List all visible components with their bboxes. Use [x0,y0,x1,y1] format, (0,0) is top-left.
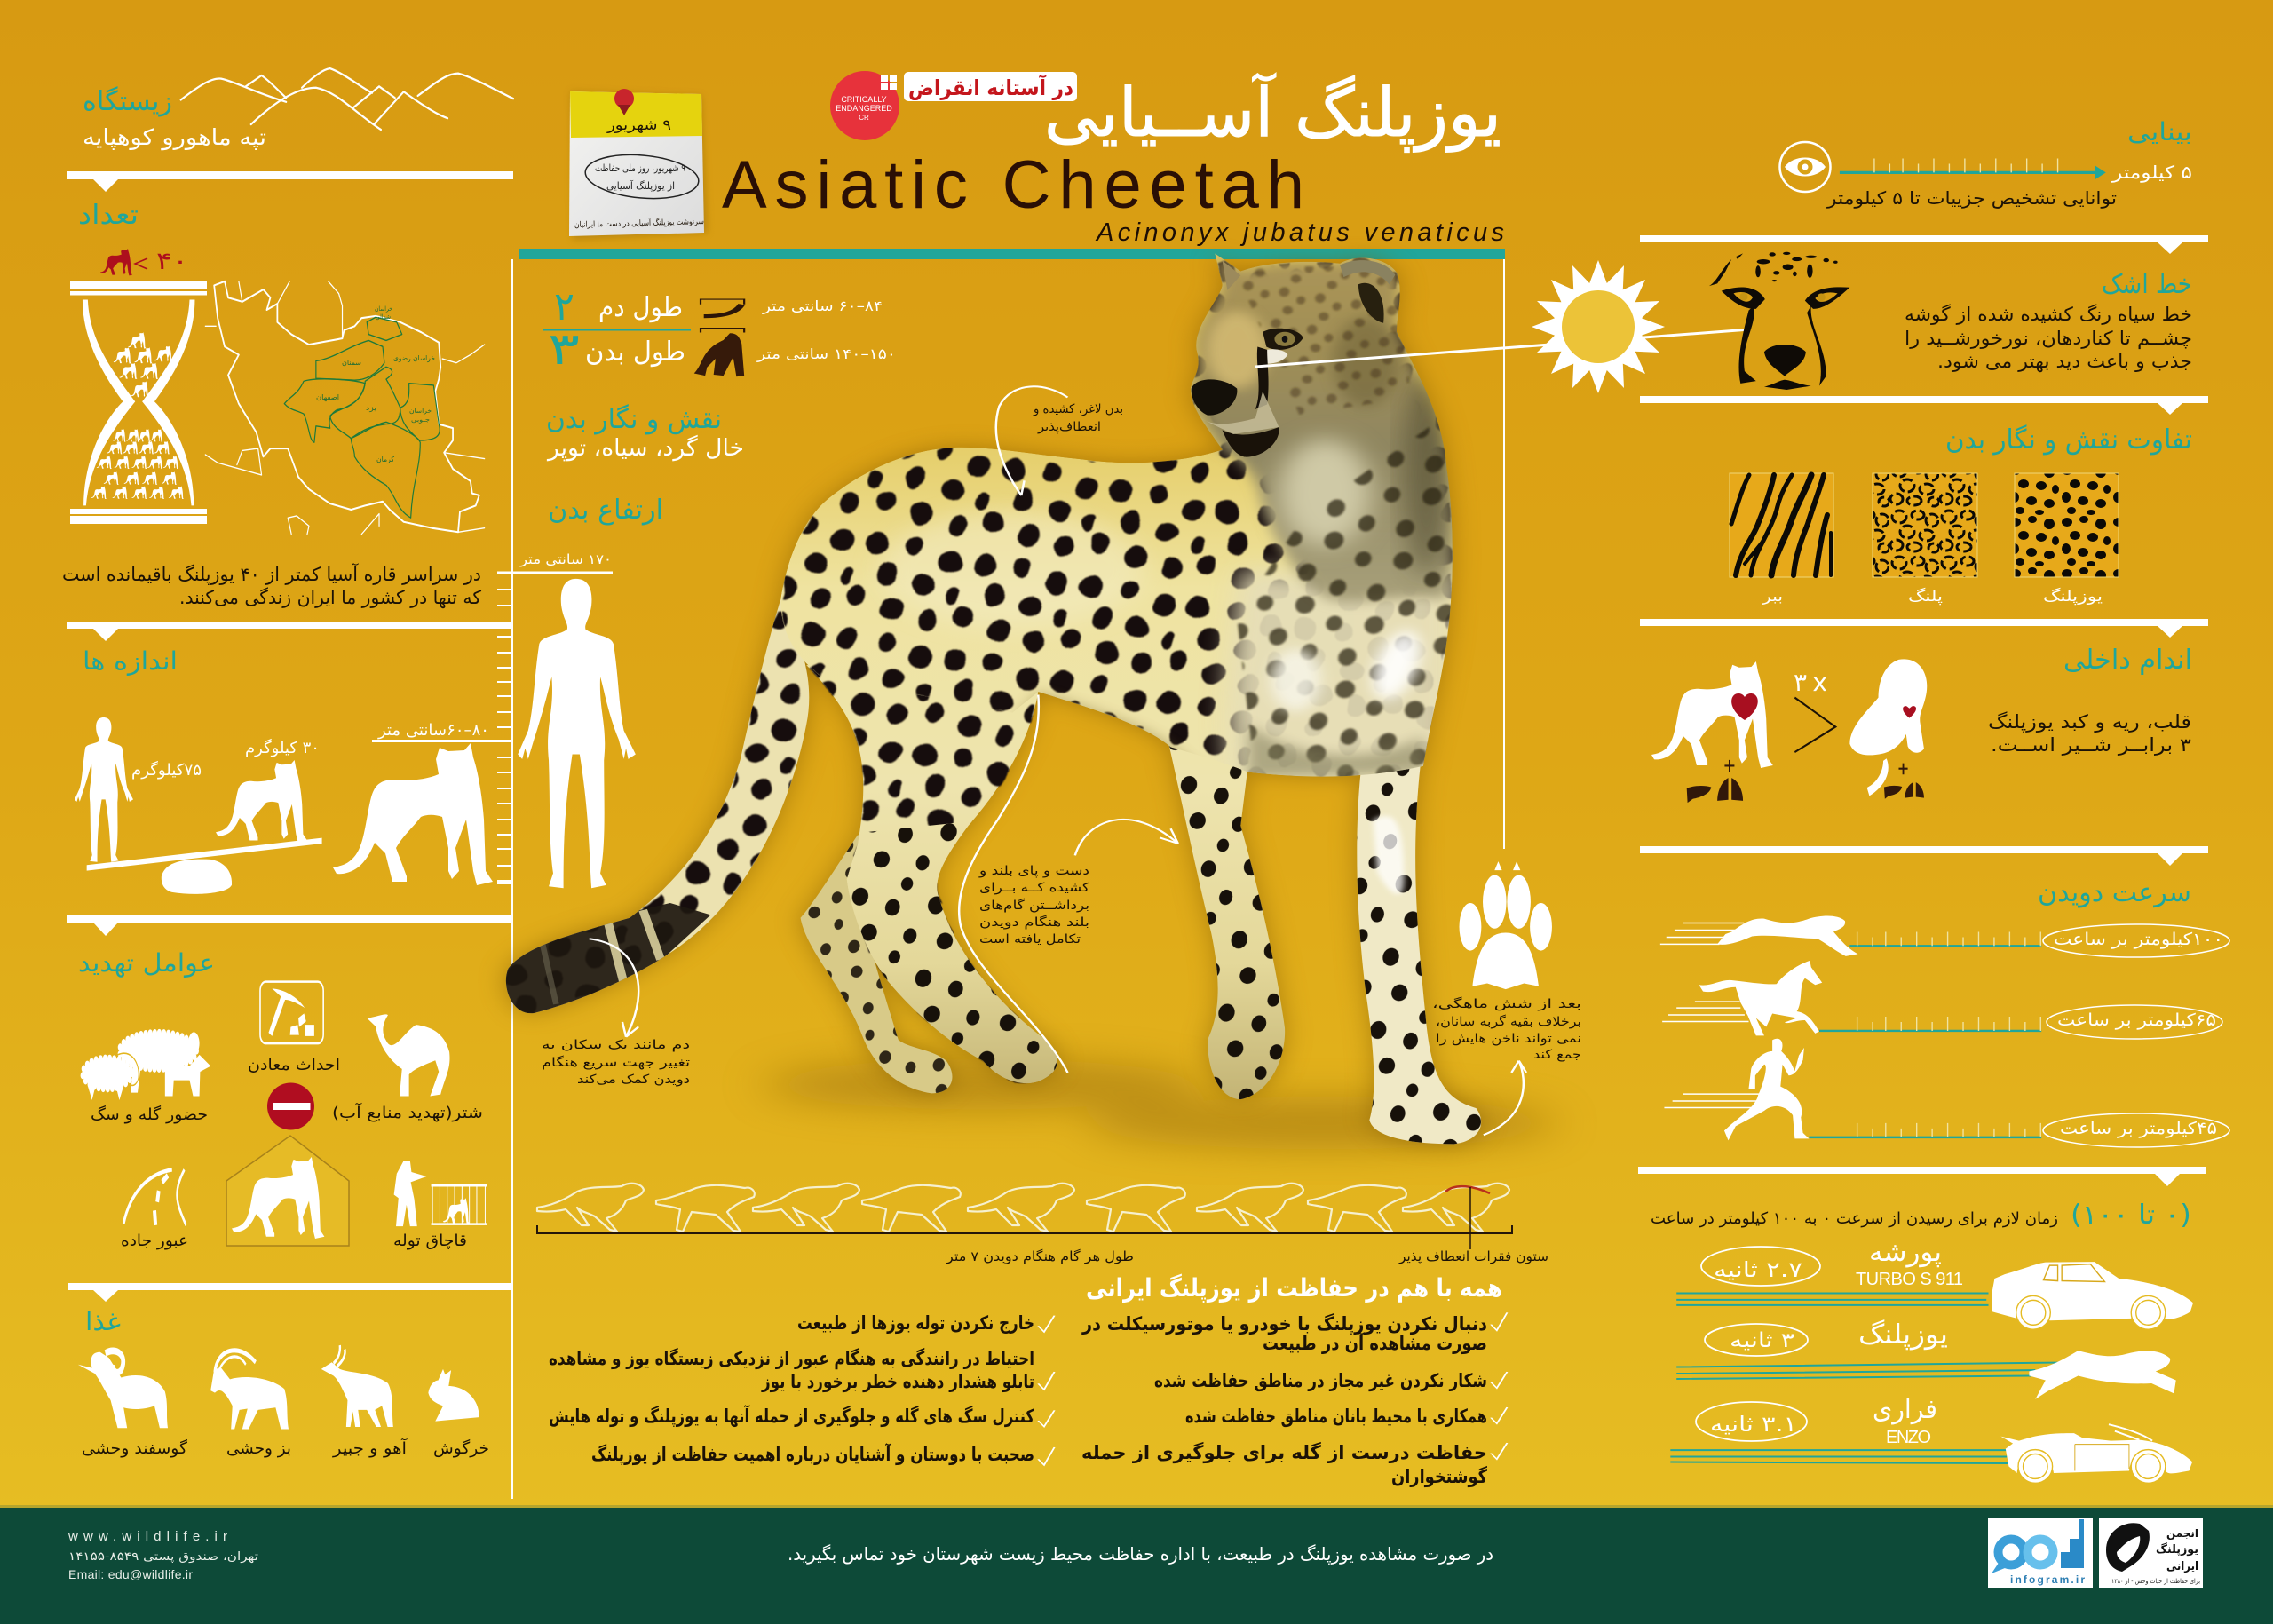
logo: infogram: infogram.ir [2010,1573,2085,1586]
badge: critically endangered: ENDANGERED [836,104,892,113]
chart: human speed ruler [1809,1123,2041,1137]
icon: calendar note [569,89,708,240]
heading: sizes: اندازه ها [83,646,178,676]
vertical guide line [1503,259,1505,849]
logo: Iranian cheetah society: ایرانی [2166,1560,2198,1573]
ground shadow [762,1059,1557,1149]
badge: critically endangered: CR [859,114,869,122]
label: 3.1 seconds [1696,1402,1807,1441]
heading: eyesight: بینایی [2127,117,2192,147]
text: 5 km: ۵ کیلومتر [2111,162,2192,183]
icon: mining pick [260,982,323,1043]
icon: calendar note: ۹ شهریور [606,116,671,134]
chart: map of Iran with cheetah provinces: شمالی [376,313,391,321]
text: lean body callout [1033,402,1123,434]
text: body pattern: خال گرد، سیاه، توپر [546,434,744,462]
text: population description: در سراسر قاره آسیا کمتر از ۴۰ یوزپلنگ باقیمانده است [62,563,481,585]
text: left list [549,1312,1035,1465]
icon: paw print [1460,861,1552,989]
icon: poacher and caged cub [394,1161,487,1226]
icon: Porsche car [1676,1262,2193,1329]
icon: calendar note: از یوزپلنگ آسیایی [606,179,675,192]
text: legs callout [978,864,1089,947]
text: acceleration description: زمان لازم برای رسیدن از سرعت ۰ به ۱۰۰ کیلومتر در ساعت [1651,1209,2058,1228]
label: 45 km/h [2043,1113,2229,1147]
label: Ferrari: ENZO [1886,1428,1931,1447]
icon: seesaw [87,838,322,894]
icon: camel [367,1014,449,1096]
text: wild sheep: گوسفند وحشی [82,1438,187,1458]
text: cheetah height: ۸۰–۶۰سانتی متر [377,721,489,740]
text: claw callout: برخلاف بقیه گربه سانان، [1436,1014,1581,1029]
ratio line [543,329,691,330]
icon: rabbit [428,1369,479,1422]
icon: cheetah large [333,743,493,885]
tail [497,599,809,1022]
title: Persian: یوزپلنگ آســیایی [1044,73,1501,153]
body [780,253,1454,784]
text: right list [1081,1312,1488,1487]
chart: map of Iran with cheetah provinces: اصفهان [316,393,339,401]
text: tail length: طول دم [598,292,683,323]
text: population description: که تنها در کشور ما ایران زندگی می‌کنند. [179,587,481,608]
text: tear line description: چشــم تا کناردهان، نورخورشــید را [1905,328,2192,350]
heading: internal organs: اندام داخلی [2063,645,2192,676]
text: right list: شکار نکردن غیر مجاز در مناطق حفاظت شده [1154,1370,1487,1391]
text: tail callout [542,1038,690,1087]
symbol: less than [135,258,147,269]
text: organs description [1988,711,2191,756]
icon: wild sheep [78,1351,168,1428]
label: 2.7 seconds: ۲.۷ ثانیه [1714,1257,1802,1282]
panel: food [78,1307,489,1458]
label: cheetah: یوزپلنگ [1858,1319,1948,1351]
icon: body length cheetah [694,329,744,376]
text: habitat type: تپه ماهورو کوهپایه [83,124,266,151]
panel: central cheetah [497,253,1750,1149]
icon: running human [1664,1039,1809,1140]
text: tail size: ۸۴–۶۰ سانتی متر [762,297,883,315]
icon: gazelle [321,1345,393,1427]
arrow: tail callout [590,939,638,1037]
icon: tail [701,299,744,316]
subtitle: scientific name: Acinonyx jubatus venaticus [1095,218,1504,247]
panel: stride diagram [537,1184,1548,1265]
text: left list: خارج نکردن توله یوزها از طبیعت [797,1312,1034,1335]
text: road crossing: عبور جاده [121,1232,188,1250]
logo: Iranian cheetah society: یوزپلنگ [2156,1542,2198,1557]
icon: red cheetah [100,249,132,275]
chart: map of Iran with cheetah provinces: سمنان [342,359,361,367]
icon: Ferrari car [1670,1424,2192,1483]
text: right list: همکاری با محیط بانان مناطق حفاظت شده [1185,1406,1487,1427]
text: human height: ۱۷۰ سانتی متر [519,551,612,567]
icon: mountains [181,68,513,130]
chart: cheetah speed ruler [1849,932,2041,946]
arrow: legs callout [959,694,1178,1073]
chart: map of Iran with cheetah provinces: جنوبی [411,416,430,424]
icon: calendar note: ۹ شهریور، روز ملی حفاظت [595,162,685,174]
text: right list: صورت مشاهده آن در طبیعت [1263,1332,1487,1354]
icon: hourglass [70,281,207,524]
icon: sheep and dog [83,1032,210,1100]
icon: lion with small heart [1849,659,1927,796]
heading: habitat: زیستگاه [83,86,172,117]
panel: population [62,200,485,608]
logo: infogram [1988,1518,2093,1588]
label: Ferrari [1873,1394,1937,1447]
badge: critically endangered: CRITICALLY [841,95,887,104]
text: tail callout: تغییر جهت سریع هنگام [542,1055,690,1070]
text: website: www.wildlife.ir [67,1529,227,1544]
text: rabbit: خرگوش [433,1438,489,1458]
heading: running speed: سرعت دویدن [2038,877,2191,908]
icon: sprinting cheetah [1676,1351,2176,1399]
heading: tear line: خط اشک [2102,269,2192,300]
text: legs callout: برداشــتن گام‌های [979,898,1089,913]
text: flexible spine: ستون فقرات انعطاف پذیر [1398,1248,1548,1265]
icon: cheetah face [1709,252,1849,390]
heading: coat patterns: تفاوت نقش و نگار بدن [1945,424,2192,456]
panel: zero to one hundred [1651,1200,2193,1483]
panel: threats [78,948,487,1250]
text: human weight: ۷۵کیلوگرم [131,760,202,780]
panel: title block [519,71,1505,259]
chart: map of Iran with cheetah provinces: خراسان [409,408,432,415]
panel: eyesight [1779,117,2192,209]
swatch: leopard [1873,473,1977,577]
text: claw callout: نمی تواند ناخن هایش را [1436,1032,1581,1046]
text: left list: تابلو هشدار دهنده خطر برخورد با یوز [761,1371,1034,1392]
text: camel: شتر(تهدید منابع آب) [332,1102,483,1122]
text: cheetah: یوزپلنگ [2043,587,2103,606]
chart: map of Iran with cheetah provinces: خراسان [375,305,392,313]
far hind leg [801,835,952,1093]
label: 100 km/h: ۱۰۰کیلومتر بر ساعت [2054,930,2223,949]
label: 65 km/h: ۶۵کیلومتر بر ساعت [2057,1010,2216,1030]
icon: cheetah with heart [1651,661,1773,768]
label: 2.7 seconds [1701,1247,1820,1286]
head details [1192,260,1395,457]
text: organs description: ۳ برابــر شــیر اســت. [1991,734,2191,756]
text: tail callout: دویدن کمک می‌کند [577,1073,690,1087]
near hind leg [806,665,1057,1083]
text: claw callout: بعد از شش ماهگی، [1432,996,1581,1011]
arrow: claw callout [1484,1061,1526,1135]
label: 3 seconds: ۳ ثانیه [1730,1329,1794,1352]
chart: map of Iran with cheetah provinces [205,281,485,535]
icons: running sequence [537,1184,1509,1232]
text: lean body callout: بدن لاغر، کشیده و [1033,402,1123,416]
chart: horse speed ruler [1819,1017,2041,1031]
swatch: tiger [1730,473,1833,577]
text: tear line description [1905,304,2192,372]
text: eyesight description: توانایی تشخیص جزییات تا ۵ کیلومتر [1826,187,2117,209]
label: Porsche: پورشه [1869,1237,1942,1268]
text: footer notice: در صورت مشاهده یوزپلنگ در طبیعت، با اداره حفاظت محیط زیست شهرستان خود تماس بگیرید. [788,1543,1493,1565]
logo: Iranian cheetah society: برای حفاظت از حیات وحش - از ۱۳۸۰ [2111,1578,2200,1585]
panel: tear line [1709,252,2192,390]
icon: calendar note: سرنوشت یوزپلنگ آسیایی در دست ما ایرانیان [574,216,704,230]
icon: human tall [518,579,636,888]
arrow: body callout [996,386,1067,495]
panel: sizes [75,646,493,894]
text: right list: دنبال نکردن یوزپلنگ با خودرو یا موتورسیکلت در [1081,1312,1487,1335]
label: on the verge of extinction: در آستانه انقراض [908,75,1073,100]
text: tear line description: خط سیاه رنگ کشیده شده از گوشه [1905,304,2192,325]
label: Porsche [1856,1237,1963,1289]
text: cub smuggling: قاچاق توله [393,1232,467,1250]
text: legs callout: کشیده کــه بــرای [979,881,1089,895]
panel: habitat [83,68,513,151]
text: email: Email: edu@wildlife.ir [68,1567,193,1581]
label: 65 km/h [2047,1005,2222,1039]
label: 3 seconds [1705,1324,1808,1356]
chart: map of Iran with cheetah provinces: کرمان [376,456,394,463]
panel: body proportions [518,284,896,888]
icon: greater than [1794,698,1835,752]
panel: footer [0,1505,2273,1624]
label: Porsche: TURBO S 911 [1856,1270,1963,1289]
text: gazelle: آهو و جبیر [332,1438,408,1458]
panel: conservation list [549,1273,1507,1487]
heading: 0 to 100: (۰ تا ۱۰۰) [2071,1200,2191,1231]
text: mining: احداث معادن [248,1056,340,1074]
text: claw callout [1432,996,1581,1062]
number: ratio 2: ۲ [554,284,574,329]
divider bar [519,249,1505,259]
heading: threats: عوامل تهدید [78,948,215,978]
text: lean body callout: انعطاف‌پذیر [1037,420,1101,434]
text: cheetah weight: ۳۰ کیلوگرم [245,738,320,757]
text: tiger: ببر [1762,588,1783,606]
heading: conservation: همه با هم در حفاظت از یوزپلنگ ایرانی [1086,1273,1502,1303]
icon: no entry sign [267,1083,314,1129]
heading: food: غذا [85,1307,121,1336]
text: left list: کنترل سگ های گله و جلوگیری از حمله آنها به یوزپلنگ و توله هایش [549,1405,1035,1427]
text: tear line description: جذب و باعث دید بهتر می شود. [1937,351,2192,372]
panel: coat patterns [1730,424,2192,606]
text: left list: صحبت با دوستان و آشنایان درباره اهمیت حفاظت از یوزپلنگ [591,1443,1034,1465]
icon: cheetah on seesaw [216,760,307,843]
label: Ferrari: فراری [1873,1394,1937,1425]
text: claw callout: جمع کند [1533,1048,1581,1062]
heading: body pattern: نقش و نگار بدن [546,404,722,435]
icon: running cheetah [1660,916,1858,956]
panel: running speed [1660,877,2229,1147]
front left leg [1167,736,1285,1099]
panel: right column rules [1638,235,2208,1186]
text: three times: ۳x [1794,668,1827,697]
chart: map of Iran with cheetah provinces: یزد [366,404,376,412]
spine highlight [1445,1186,1490,1193]
text: legs callout: دست و پای بلند و [978,864,1089,878]
arrow: tear line pointer [1255,329,1750,367]
icon: sun [1532,260,1665,393]
text: leopard: پلنگ [1908,587,1943,606]
baseline [537,1225,1512,1233]
icon: road [123,1169,186,1225]
chart: map of Iran with cheetah provinces: خراسان رضوی [393,354,435,362]
text: herd and dog: حضور گله و سگ [91,1105,208,1124]
icon: running horse [1662,961,1822,1035]
pointer [1469,1187,1471,1249]
check marks [1038,1312,1507,1465]
logo: Iranian cheetah society [2099,1518,2203,1588]
label: 45 km/h: ۴۵کیلومتر بر ساعت [2060,1119,2217,1138]
icon: lion organs [1884,764,1924,799]
text: address: تهران، صندوق پستی ۸۵۴۹-۱۴۱۵۵ [68,1550,258,1564]
front right leg [1357,760,1481,1144]
text: body size: ۱۵۰–۱۴۰ سانتی متر [756,345,896,363]
illustration: cheetah [497,253,1481,1144]
logo: Iranian cheetah society: انجمن [2166,1527,2198,1540]
text: wild goat: بز وحشی [226,1439,291,1458]
chart: distance ruler [1840,159,2106,179]
text: legs callout: تکامل یافته است [979,932,1081,947]
text: legs callout: بلند هنگام دویدن [979,915,1089,930]
text: population description [62,563,481,608]
number: ratio 3: ۳ [548,323,580,375]
text: organs description: قلب، ریه و کبد یوزپلنگ [1988,711,2191,733]
panel: internal organs [1651,645,2192,803]
title: English: Asiatic Cheetah [722,147,1304,223]
text: right list: حفاظت درست از گله برای جلوگیری از حمله [1081,1441,1487,1463]
text: body length: طول بدن [585,337,685,368]
swatch: cheetah [2015,473,2119,577]
heading: body height: ارتفاع بدن [548,495,663,526]
text: less than 40: ۴۰ [156,248,188,275]
icon: cheetah in house [226,1136,349,1246]
heading: population: تعداد [78,200,139,231]
text: tail callout: دم مانند یک سکان به [542,1038,690,1052]
label: 100 km/h [2043,924,2229,957]
icon: wild goat [210,1351,289,1430]
icon: cheetah organs [1687,760,1743,803]
text: right list: گوشتخواران [1391,1465,1488,1487]
panel: left column frame and rules [67,171,613,1499]
icon: human small [75,717,133,862]
text: stride length: طول هر گام هنگام دویدن ۷ متر [946,1248,1134,1264]
icon: eye [1779,142,1831,192]
badge: critically endangered [830,71,899,140]
label: 3.1 seconds: ۳.۱ ثانیه [1710,1412,1797,1437]
text: left list: احتیاط در رانندگی به هنگام عبور از نزدیکی زیستگاه یوز و مشاهده [549,1347,1034,1369]
